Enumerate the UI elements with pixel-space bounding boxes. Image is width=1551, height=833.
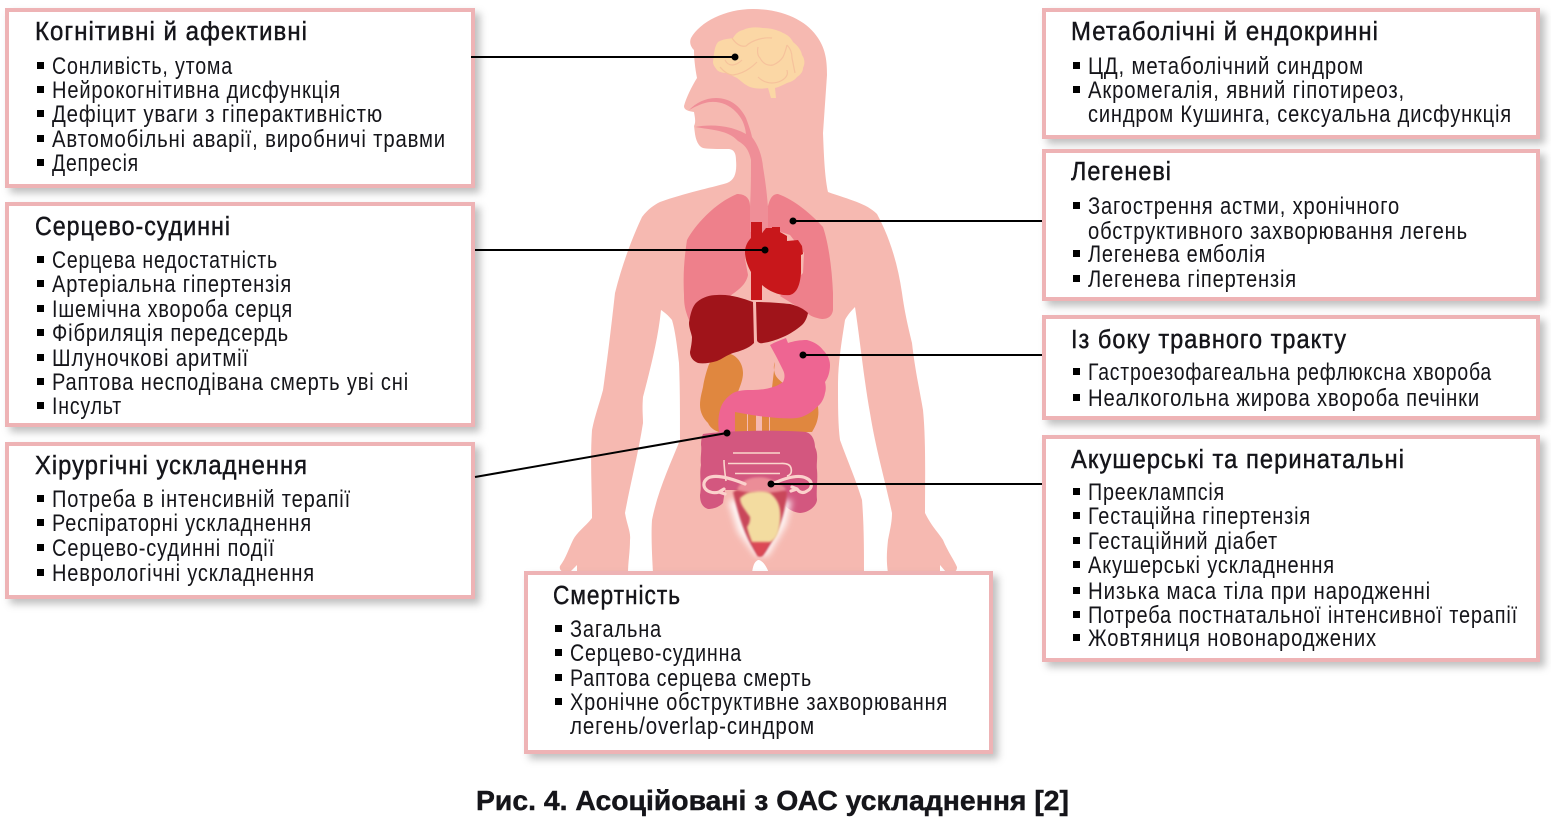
list: cardiovascular: Ішемічна хвороба серця (52, 296, 293, 323)
list: mortality (555, 616, 948, 740)
list: mortality: Раптова серцева смерть (570, 665, 812, 692)
list: mortality: легень/overlap-синдром (570, 713, 815, 740)
panel: metabolic and endocrine (1044, 10, 1538, 137)
list: pulmonary: обструктивного захворювання легень (1088, 218, 1468, 245)
list: pulmonary: Легенева гіпертензія (1088, 266, 1297, 293)
caption: Рис. 4. Асоційовані з ОАС ускладнення [2] (476, 785, 1069, 816)
list: mortality: Загальна (570, 616, 662, 643)
list: obstetric: Акушерські ускладнення (1088, 552, 1335, 579)
heading: cognitive: Когнітивні й афективні (35, 18, 308, 46)
heading: metabolic: Метаболічні й ендокринні (1071, 18, 1379, 46)
list: surgical: Серцево-судинні події (52, 535, 275, 562)
heading: gastrointestinal: Із боку травного тракту (1071, 326, 1347, 354)
leader line: obstetric (768, 480, 1042, 488)
list: pulmonary: Загострення астми, хронічного (1088, 193, 1400, 220)
heading: cardiovascular: Серцево-судинні (35, 213, 231, 241)
body silhouette (560, 9, 957, 573)
list: pulmonary (1073, 193, 1468, 293)
list: cognitive: Дефіцит уваги з гіперактивністю (52, 101, 383, 128)
list: cardiovascular: Шлуночкові аритмії (52, 345, 249, 372)
heading: surgical: Хірургічні ускладнення (35, 452, 308, 480)
leader line: cognitive (471, 54, 738, 60)
list: gastrointestinal (1073, 359, 1492, 412)
leader line: surgical (475, 430, 730, 477)
leader line: gastrointestinal (800, 352, 1042, 358)
small intestine lines (724, 453, 791, 481)
stomach and duodenum (718, 338, 830, 432)
panel: obstetric and perinatal (1044, 437, 1538, 660)
list: cardiovascular: Серцева недостатність (52, 247, 278, 274)
panel: cardiovascular (7, 204, 473, 425)
list: cardiovascular: Артеріальна гіпертензія (52, 271, 292, 298)
list: cognitive: Автомобільні аварії, виробничі травми (52, 126, 446, 153)
list: obstetric (1073, 479, 1518, 652)
list: cardiovascular (37, 247, 409, 420)
list: mortality: Серцево-судинна (570, 640, 742, 667)
panel: cognitive and affective (7, 10, 473, 186)
list: cognitive: Сонливість, утома (52, 53, 233, 80)
list: surgical: Потреба в інтенсивній терапії (52, 486, 351, 513)
list: gastrointestinal: Неалкогольна жирова хвороба печінки (1088, 385, 1480, 412)
heading: mortality: Смертність (553, 582, 681, 610)
list: pulmonary: Легенева емболія (1088, 241, 1266, 268)
panel: pulmonary (1044, 151, 1538, 299)
liver (689, 295, 808, 363)
list: obstetric: Прееклампсія (1088, 479, 1225, 506)
list: cognitive: Депресія (52, 150, 139, 177)
heading: pulmonary: Легеневі (1071, 158, 1172, 186)
leader line: pulmonary (790, 218, 1042, 224)
list: cardiovascular: Інсульт (52, 393, 122, 420)
human body figure (560, 9, 957, 573)
airway and esophagus (689, 98, 768, 232)
list: obstetric: Жовтяниця новонароджених (1088, 625, 1377, 652)
panel: surgical complications (7, 444, 473, 597)
list: cardiovascular: Раптова несподівана смерть уві сні (52, 369, 409, 396)
heading: obstetric: Акушерські та перинатальні (1071, 446, 1405, 474)
kidneys and pancreas (700, 353, 818, 434)
list: surgical: Неврологічні ускладнення (52, 560, 315, 587)
fallopian tubes (704, 476, 811, 494)
list: cardiovascular: Фібриляція передсердь (52, 320, 289, 347)
list: obstetric: Гестаційний діабет (1088, 528, 1278, 555)
list: obstetric: Низька маса тіла при народженні (1088, 578, 1431, 605)
list: cognitive: Нейрокогнітивна дисфункція (52, 77, 341, 104)
list: surgical (37, 486, 351, 587)
panel: gastrointestinal (1044, 317, 1538, 418)
leader line: cardiovascular (475, 246, 768, 254)
uterus and fetus (728, 477, 792, 570)
list: obstetric: Гестаційна гіпертензія (1088, 503, 1311, 530)
heart (745, 222, 803, 300)
brain (713, 27, 804, 98)
list: cognitive (37, 53, 446, 177)
list: metabolic: ЦД, метаболічний синдром (1088, 53, 1364, 80)
panel: mortality (526, 573, 991, 752)
large intestine (700, 431, 817, 513)
list: metabolic: Акромегалія, явний гіпотиреоз, (1088, 77, 1405, 104)
lungs (684, 194, 833, 320)
list: surgical: Респіраторні ускладнення (52, 510, 312, 537)
list: metabolic (1073, 53, 1512, 128)
list: mortality: Хронічне обструктивне захворювання (570, 689, 948, 716)
